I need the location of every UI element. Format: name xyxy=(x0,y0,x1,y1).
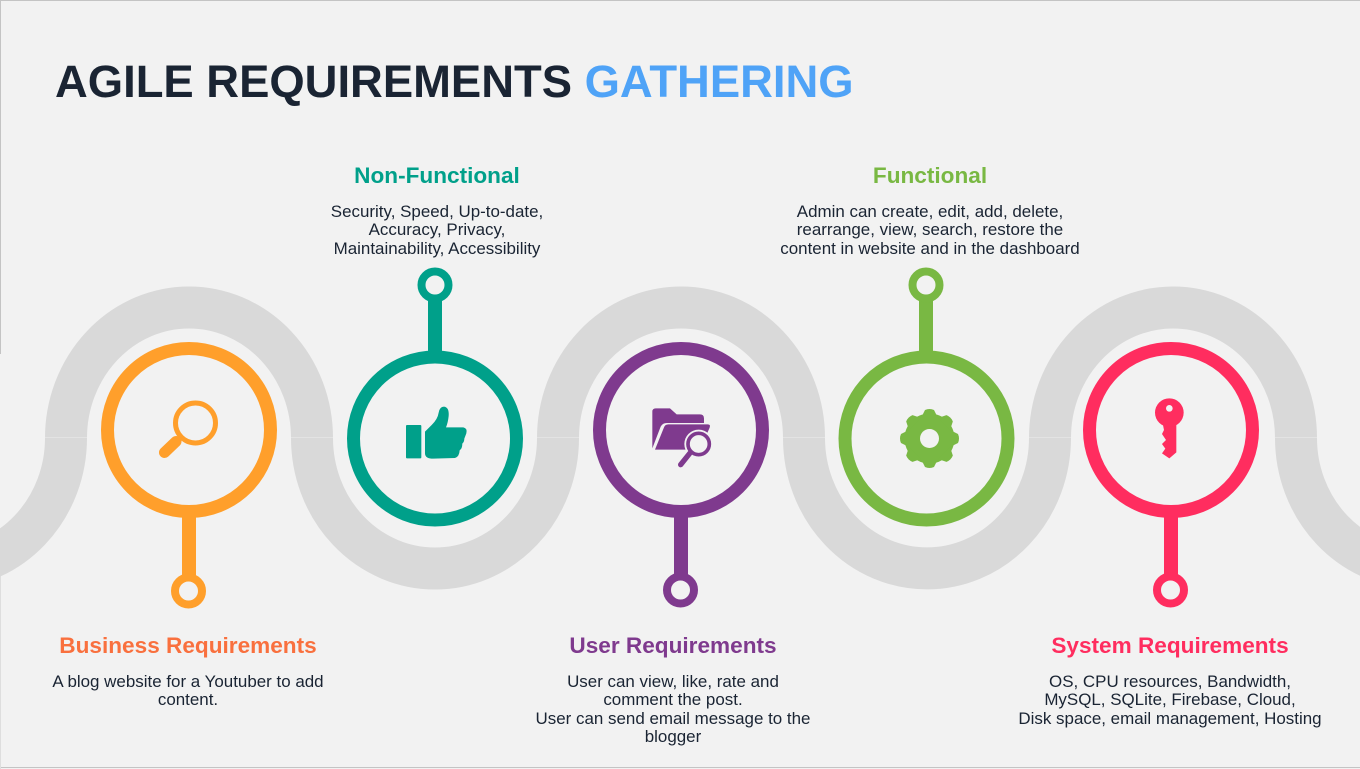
text: functional: Admin can create, edit, add, delete, xyxy=(797,202,1063,221)
icon: key xyxy=(1155,398,1184,458)
heading: system: System Requirements xyxy=(1051,633,1289,658)
text: non-functional: Accuracy, Privacy, xyxy=(369,220,505,239)
connector: user xyxy=(674,516,688,578)
wave road xyxy=(0,308,1360,568)
step 4: functional xyxy=(780,163,1080,520)
icon: folder search xyxy=(652,408,713,465)
text: user: User can send email message to the xyxy=(536,709,810,728)
icon: gear xyxy=(900,409,959,468)
ring: system xyxy=(1090,348,1252,512)
icon: magnifier xyxy=(164,403,216,452)
node: non-functional xyxy=(422,272,448,298)
title: AGILE REQUIREMENTS GATHERING xyxy=(55,56,854,107)
connector: system xyxy=(1164,516,1178,578)
text: system: MySQL, SQLite, Firebase, Cloud, xyxy=(1044,690,1296,709)
text: system: Disk space, email management, Hosting xyxy=(1018,709,1322,728)
node: business xyxy=(175,578,202,604)
step 5: system requirements xyxy=(1018,348,1322,728)
heading: user: User Requirements xyxy=(569,633,777,658)
text: business xyxy=(52,672,324,709)
text: user: comment the post. xyxy=(603,690,743,709)
text: non-functional: Security, Speed, Up-to-date, xyxy=(331,202,543,221)
ring: functional xyxy=(845,357,1008,520)
text: system xyxy=(1018,672,1322,728)
ring: non-functional xyxy=(354,357,516,520)
text: business: A blog website for a Youtuber to add xyxy=(52,672,324,691)
connector: functional xyxy=(919,296,933,356)
node: system xyxy=(1157,576,1184,604)
step 2: non-functional xyxy=(331,163,543,520)
heading: functional: Functional xyxy=(873,163,987,188)
text: user xyxy=(536,672,810,746)
connector: business xyxy=(182,516,196,578)
ring: business xyxy=(108,348,270,512)
ring: user xyxy=(600,348,762,512)
icon: thumbs up xyxy=(406,407,467,459)
text: functional xyxy=(780,202,1080,258)
text: non-functional xyxy=(331,202,543,258)
step 1: business requirements xyxy=(52,348,324,709)
text: non-functional: Maintainability, Accessibility xyxy=(334,239,541,258)
text: system: OS, CPU resources, Bandwidth, xyxy=(1049,672,1291,691)
heading: non-functional: Non-Functional xyxy=(354,163,520,188)
node: user xyxy=(667,576,694,604)
step 3: user requirements xyxy=(536,348,810,746)
text: user: blogger xyxy=(645,727,702,746)
text: business: content. xyxy=(158,690,218,709)
connector: non-functional xyxy=(428,296,442,356)
heading: business: Business Requirements xyxy=(59,633,317,658)
text: functional: rearrange, view, search, restore the xyxy=(797,220,1063,239)
text: user: User can view, like, rate and xyxy=(567,672,779,691)
node: functional xyxy=(912,272,940,298)
text: functional: content in website and in the dashboard xyxy=(780,239,1080,258)
